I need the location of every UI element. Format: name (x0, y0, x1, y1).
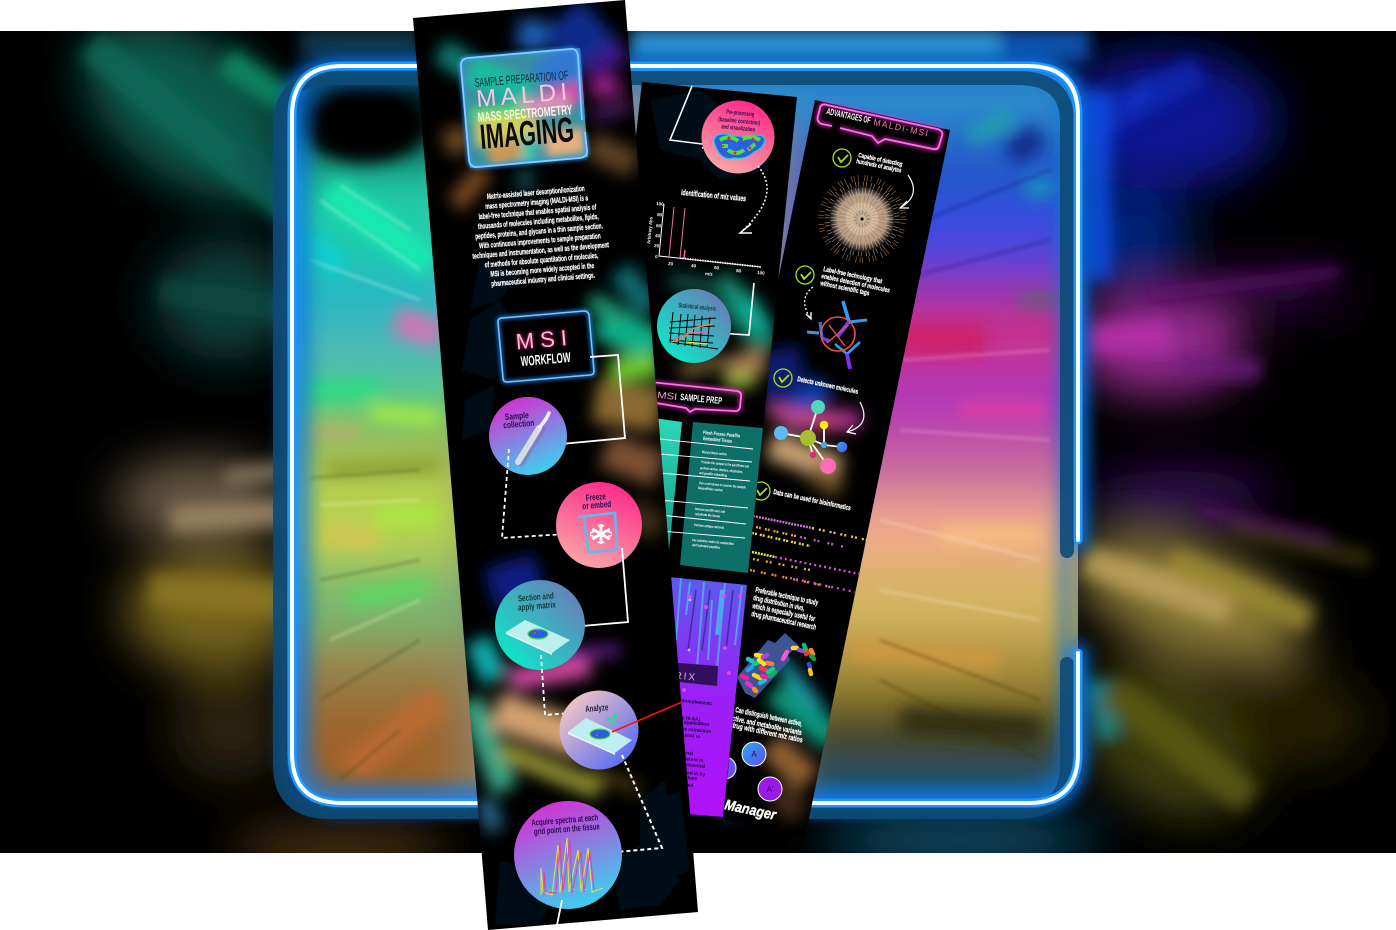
card text: Deparaffinize section (698, 486, 723, 492)
matrix text block: values (682, 775, 698, 782)
icon: analyte circles: A' (767, 785, 774, 794)
arrow: dashed section to analyze (541, 655, 580, 717)
chart: analyte starburst (821, 178, 903, 260)
matrix text block: 2,5-dihydroxybenzoic (663, 696, 713, 707)
matrix text block: and analyte extraction (660, 724, 711, 735)
matrix text block: standard of interest is (653, 753, 704, 764)
circle: pre-processing (702, 100, 774, 174)
card text: Flash Frozen Paraffin (703, 430, 740, 440)
panel burst colours (650, 90, 770, 382)
panel: workflow (left strip) (413, 0, 698, 930)
heading: identification of m/z values: Identification of m/z values (681, 188, 747, 203)
text: preferable technique: Preferable technique to study (755, 585, 820, 607)
card text: Use a microtome to section the sample (699, 481, 746, 490)
card text: Embedded Tissue (703, 436, 732, 445)
intro paragraph: peptides, proteins, and glycans in a thin sample section. (475, 221, 603, 241)
title text (474, 68, 575, 157)
text: label-free (819, 266, 891, 297)
icon: tissue heat map (714, 134, 765, 159)
header: MSI sample prep (650, 382, 741, 412)
icon: check 2 (796, 266, 814, 284)
title box (461, 48, 590, 168)
card: fresh frozen (left column) (640, 416, 682, 560)
matrix text block: choice depends application (646, 716, 709, 728)
text: capable of detecting: Capable of detecting (858, 152, 903, 168)
matrix text block: deemed essential (665, 760, 705, 770)
icon: tissue slide with particles (568, 714, 632, 755)
MSI workflow box (498, 311, 594, 382)
header: MSI sample prep: SAMPLE PREP (680, 392, 723, 407)
neon frame (280, 66, 1078, 812)
circle: freeze or embed: or embed (582, 499, 612, 511)
panel burst colours (440, 20, 690, 925)
panel burst colours (770, 350, 860, 815)
text: label-free: enables detection of molecules (821, 273, 891, 295)
matrix streak artwork (676, 578, 743, 692)
matrix text block: used (682, 782, 693, 789)
matrix text block: can be used to (666, 731, 700, 740)
icon: antibodies crossed out (807, 301, 867, 369)
circle: sample collection (489, 397, 567, 475)
circle: pre-processing: Pre-processing (726, 109, 755, 118)
chart: mass spectrum (646, 201, 765, 277)
matrix title band (640, 660, 718, 686)
circle: section and apply matrix: Section and (517, 591, 554, 603)
card text (692, 430, 749, 550)
circle: section and apply matrix: apply matrix (517, 599, 556, 613)
matrix text block: is defined in by (670, 769, 706, 778)
card text: rehydrate the tissue (695, 512, 720, 518)
arrow: dashed analyze to acquire (603, 755, 662, 857)
arrow: dashed to identification (740, 166, 767, 233)
chart: mass spectrum: 60 (656, 223, 662, 229)
arrow: to pre-processing (670, 86, 711, 148)
matrix text block: internal (676, 749, 693, 757)
chart: mass spectrum: 20 (668, 261, 674, 267)
inner explosion colours (296, 70, 1078, 798)
icon: spilled pill bottle (737, 633, 814, 698)
card text: and paraffin embedding (699, 471, 727, 478)
MSI workflow box: WORKFLOW (520, 349, 572, 369)
circle: analyze (560, 690, 638, 770)
chart: mass spectrum: 40 (691, 263, 697, 269)
circle: acquire spectra: grid point on the tissue (533, 821, 600, 837)
header: advantages of MALDI-MSI: ADVANTAGES OF (826, 106, 872, 125)
chart: mass spectrum: m/z (705, 271, 714, 277)
card text: perform section. Washes, rehydration, (700, 466, 743, 474)
text: can distinguish: inactive, and metabolite variants (725, 712, 803, 737)
circle: section and apply matrix (495, 580, 585, 670)
title text: MASS SPECTROMETRY (477, 102, 573, 125)
text: preferable technique: which is especially useful for (751, 601, 816, 623)
icon: analyte circles (714, 742, 782, 801)
card text: Use selective matrix for metabolites (692, 538, 734, 546)
header: MSI sample prep: MSI (657, 390, 678, 403)
intro paragraph: MSI is becoming more widely accepted in the (490, 261, 595, 279)
text: bioinformatics: Data can be used for bioinformatics (773, 487, 852, 512)
panel: advantages of MALDI-MSI (right strip) (723, 100, 950, 834)
arrow: dashed to antibody (805, 287, 813, 319)
intro paragraph: of methods for absolute quantitation of molecules, (484, 251, 599, 269)
matrix title band: MATRIX (648, 668, 698, 684)
title text: MALDI (475, 78, 568, 113)
circle: freeze or embed: Freeze (585, 491, 606, 503)
icon: beaker with snowflake (578, 513, 617, 552)
card: matrix (671, 577, 747, 817)
icon: tissue slide (506, 620, 570, 655)
card: flash frozen paraffin embedded (680, 422, 763, 573)
arrow: workflow to sample collection (549, 355, 625, 449)
text: capable of detecting: hundreds of analytes (856, 158, 902, 175)
intro paragraph (467, 182, 612, 290)
chart: mass spectrum: 60 (714, 265, 720, 271)
text: preferable technique (751, 585, 820, 632)
arrow: to statistical analysis (718, 283, 754, 337)
chart: mass spectrum: 40 (655, 233, 661, 239)
fine radial texture (310, 170, 1050, 780)
text: label-free: without scientific tags (819, 280, 870, 297)
icon: analyte circles: A (751, 750, 757, 759)
logo: Manager wordmark: Manager (723, 797, 779, 824)
card text: Perform antigen retrieval (694, 523, 724, 530)
icon: check 3 (774, 369, 792, 387)
text: detects unknown molecules: Detects unknown molecules (797, 376, 859, 396)
circle: acquire spectra (514, 801, 622, 909)
arrow: curve to analyte burst (900, 175, 913, 208)
intro paragraph: pharmaceutical industry and clinical settings. (491, 271, 595, 288)
card text: Remove paraffin wax and (695, 507, 725, 514)
circle: statistical analysis (657, 289, 731, 363)
chart: spectra peaks (541, 838, 603, 895)
card text: Manual tissue section (702, 450, 727, 456)
chart: mass spectrum: 20 (654, 243, 660, 249)
text: can distinguish (720, 705, 804, 744)
header: advantages of MALDI-MSI (818, 104, 942, 149)
icon: check 1 (833, 149, 851, 167)
outer explosion streaks (90, 45, 1370, 800)
circle: sample collection: Sample (504, 410, 529, 422)
icon: check 4 (752, 482, 770, 500)
circle: statistical analysis: Statistical analysis (678, 302, 717, 313)
chart: mass spectrum: 0 (655, 254, 658, 259)
chart: mass spectrum: 100 (656, 201, 664, 207)
intro paragraph: techniques and instrumentation, as well as the development (472, 240, 610, 261)
circle: acquire spectra: Acquire spectra at each (531, 812, 599, 828)
text: can distinguish: Can distinguish between active, (735, 705, 803, 728)
chart: mass spectrum: Arbitrary Abs (646, 216, 654, 244)
dark patch top-left of frame (303, 87, 427, 163)
header: advantages of MALDI-MSI: MALDI-MSI (873, 117, 930, 139)
circle: pre-processing: and visualization (721, 123, 756, 134)
text: preferable technique: drug pharmaceutical research (751, 609, 817, 632)
icon: molecule (774, 400, 847, 474)
panel: analysis and sample prep (middle strip) (636, 82, 797, 826)
text: can distinguish: of a drug with different m/z ratios (720, 718, 804, 744)
arrow: freeze to section (570, 548, 628, 631)
circle: pre-processing: (baseline correction) (718, 116, 760, 127)
intro paragraph: thousands of molecules including metabolites, lipids, (478, 212, 599, 231)
card text: Transfer the sample to the paraffinize and (701, 460, 749, 469)
intro paragraph: With continuous improvements to sample preparation (479, 231, 601, 250)
MSI workflow box: MSI (515, 325, 574, 354)
chart: mass spectrum: 80 (657, 212, 663, 218)
card text: and hydrated peptides (692, 543, 720, 550)
intro paragraph: Matrix-assisted laser desorption/ionization (487, 184, 585, 201)
title text: IMAGING (478, 110, 575, 157)
MSI workflow box: MSI (515, 325, 574, 354)
line: continuation to next strip (557, 900, 562, 925)
text: capable of detecting (856, 152, 903, 175)
top strip of blue colour (300, 28, 1090, 62)
intro paragraph: mass spectrometry imaging (MALDI-MSI) is a (485, 193, 589, 211)
matrix text block: 9-aminoacridine (9-AA) (648, 712, 701, 723)
circle: analyze: Analyze (585, 702, 609, 714)
arrow: curve to molecule (847, 402, 864, 434)
chart: mass spectrum: 100 (757, 270, 765, 276)
chart: mass spectrum: 80 (736, 268, 742, 274)
text: preferable technique: drug distribution in vivo, (753, 593, 805, 613)
circle: sample collection: collection (503, 418, 535, 430)
chart: bioinformatics data dots (750, 516, 867, 592)
circle: freeze or embed (556, 482, 642, 568)
text: label-free: Label-free technology that (823, 266, 883, 286)
title text: SAMPLE PREPARATION OF (474, 68, 569, 90)
intro paragraph: label-free technique that enables spatial analysis of (478, 202, 597, 221)
icon: scalpel (518, 413, 549, 463)
matrix text block (646, 696, 713, 789)
arrow: dashed sample to freeze (502, 449, 579, 538)
arrow: red zoom line to matrix (612, 702, 682, 732)
table rule lines (660, 439, 753, 538)
